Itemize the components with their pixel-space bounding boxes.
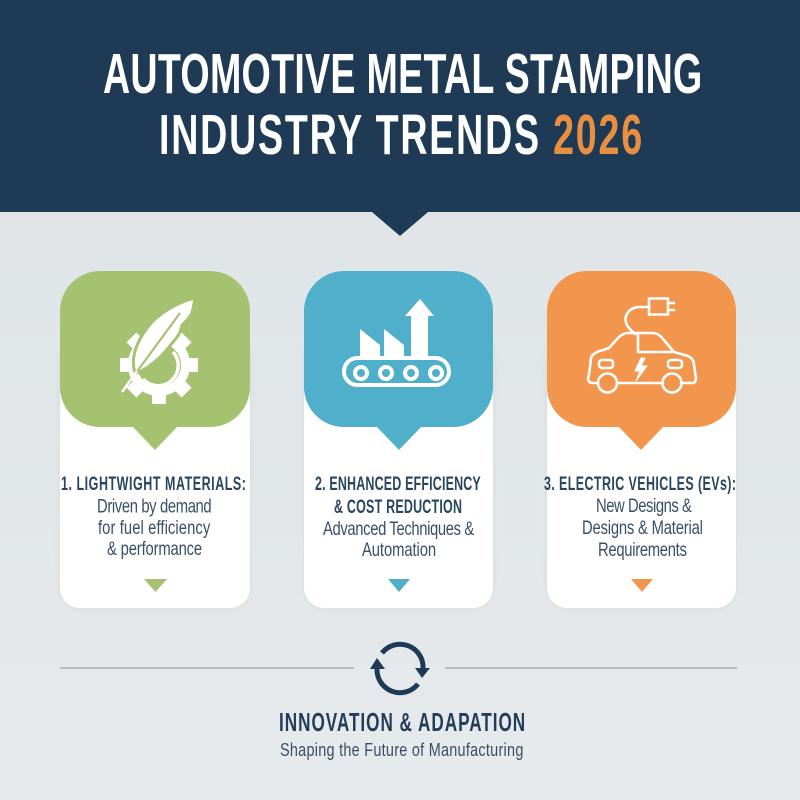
icon: conveyor and arrow — [344, 299, 449, 385]
panel: enhanced efficiency — [304, 271, 493, 608]
panel header: blue speech bubble — [304, 271, 493, 450]
arrow marker — [144, 579, 167, 592]
footer subheading: Shaping the Future of Manufacturing — [280, 739, 523, 760]
icon: feather and gear — [120, 298, 198, 404]
footer heading: INNOVATION & ADAPATION — [279, 707, 525, 737]
panel: lightweight materials — [60, 271, 250, 608]
arrow marker — [388, 579, 410, 592]
icon: electric car — [588, 298, 696, 392]
panel text: 1. LIGHTWIGHT MATERIALS: — [61, 473, 246, 495]
arrow marker — [631, 579, 653, 592]
panel text — [61, 473, 246, 559]
panel text: 2. ENHANCED EFFICIENCY — [315, 473, 481, 495]
title — [103, 42, 702, 167]
panel: electric vehicles — [544, 271, 736, 608]
panel text: Advanced Techniques & — [323, 518, 475, 539]
panel text: New Designs & — [596, 495, 692, 516]
panel text: & performance — [107, 538, 202, 559]
panel text: Requirements — [598, 539, 687, 560]
icon: cycle arrows — [370, 644, 430, 693]
panel text — [315, 473, 481, 560]
panel text: 3. ELECTRIC VEHICLES (EVs): — [544, 473, 736, 495]
panel text: Automation — [362, 539, 436, 560]
panel header: orange speech bubble — [547, 271, 736, 450]
panel header: green speech bubble — [60, 271, 250, 450]
header banner — [0, 0, 800, 236]
panel text: Driven by demand — [97, 496, 212, 517]
panel text: & COST REDUCTION — [334, 496, 462, 518]
panel text: Designs & Material — [582, 517, 703, 538]
footer divider lines — [60, 667, 737, 669]
title: INDUSTRY TRENDS 2026 — [159, 103, 642, 167]
panel text — [544, 473, 736, 560]
panel text: for fuel efficiency — [98, 517, 211, 538]
title: AUTOMOTIVE METAL STAMPING — [103, 42, 702, 106]
